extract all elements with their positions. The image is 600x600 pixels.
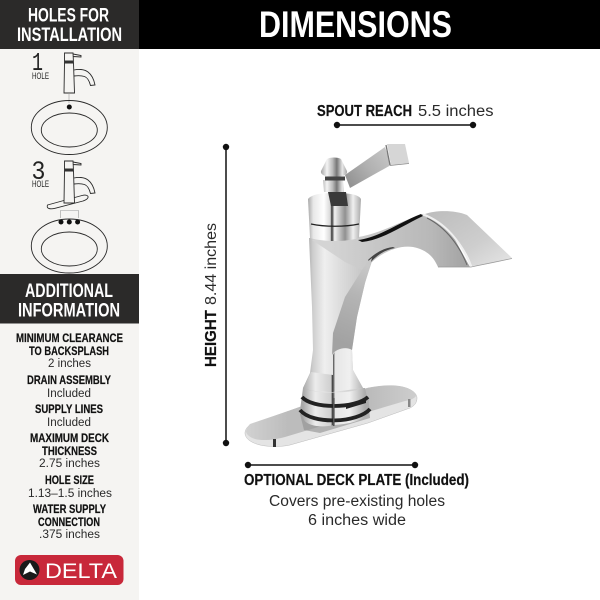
text block: maximum deck thickness xyxy=(30,433,110,470)
text block: maximum deck thickness: THICKNESS xyxy=(42,446,97,458)
text block: water supply connection: WATER SUPPLY xyxy=(33,504,106,516)
panel: sidebar background xyxy=(0,0,139,600)
body foot xyxy=(303,372,333,392)
text block: minimum clearance xyxy=(16,333,123,370)
icon: single-hole faucet xyxy=(64,53,95,103)
text block: hole size: 1.13–1.5 inches xyxy=(28,488,112,500)
panel: additional information xyxy=(0,274,139,585)
icon: sink with three holes xyxy=(31,210,107,273)
logo: Delta xyxy=(15,555,124,585)
text block: minimum clearance: 2 inches xyxy=(48,358,91,370)
label: 1 hole: 1 xyxy=(32,48,43,78)
callout: optional deck plate xyxy=(244,462,469,529)
text block: drain assembly: DRAIN ASSEMBLY xyxy=(27,375,111,387)
logo: Delta: DELTA xyxy=(45,560,117,583)
icon: sink with one hole xyxy=(31,100,107,154)
heading: additional information xyxy=(0,274,139,324)
callout: optional deck plate: Covers pre-existing holes xyxy=(269,493,445,510)
label: 3 hole: 3 xyxy=(32,157,45,185)
handle lever xyxy=(345,144,409,188)
spout top dark edge xyxy=(358,214,423,242)
text block: water supply connection: .375 inches xyxy=(39,529,100,541)
handle cap xyxy=(321,158,347,192)
heading: holes for installation: HOLES FOR xyxy=(28,6,109,27)
callout: optional deck plate: OPTIONAL DECK PLATE (Included) xyxy=(244,472,469,489)
callout: optional deck plate: 6 inches wide xyxy=(308,512,406,529)
text block: hole size xyxy=(28,475,112,500)
panel: holes for installation xyxy=(0,0,139,273)
icon: three-hole faucet with deck plate xyxy=(47,161,95,209)
faucet illustration xyxy=(245,144,512,447)
spout front face xyxy=(425,211,512,266)
text block: drain assembly xyxy=(27,375,111,400)
text block: water supply connection xyxy=(33,504,106,541)
text block: maximum deck thickness: MAXIMUM DECK xyxy=(30,433,110,445)
callout: spout reach xyxy=(317,103,494,128)
heading: holes for installation xyxy=(0,0,139,49)
faucet collar xyxy=(308,192,361,241)
text block: water supply connection: CONNECTION xyxy=(38,517,100,529)
callout: spout reach: SPOUT REACH xyxy=(317,103,412,120)
arrow: height measure xyxy=(223,144,229,446)
text block: maximum deck thickness: 2.75 inches xyxy=(39,458,100,470)
text block: drain assembly: Included xyxy=(47,388,91,400)
column below shadow xyxy=(333,348,363,392)
heading: additional information: ADDITIONAL xyxy=(25,281,113,302)
callout: height: HEIGHT xyxy=(203,309,220,367)
label: 3 hole: HOLE xyxy=(32,179,49,189)
text block: supply lines xyxy=(35,404,103,429)
arrow: deck plate measure xyxy=(245,462,418,468)
arrow: spout reach measure xyxy=(334,122,476,128)
spout xyxy=(312,211,512,355)
deck plate xyxy=(245,386,417,447)
text block: hole size: HOLE SIZE xyxy=(45,475,94,487)
text block: minimum clearance: MINIMUM CLEARANCE xyxy=(16,333,123,345)
body shaded side xyxy=(332,258,372,355)
title band: dimensions: DIMENSIONS xyxy=(259,3,452,45)
heading: holes for installation: INSTALLATION xyxy=(17,25,122,46)
callout: spout reach: 5.5 inches xyxy=(418,103,494,120)
callout: height: 8.44 inches xyxy=(203,223,220,305)
text block: supply lines: Included xyxy=(47,417,91,429)
spout underside reflection xyxy=(368,247,395,263)
label: 1 hole: HOLE xyxy=(32,71,49,81)
heading: additional information: INFORMATION xyxy=(18,300,120,322)
text block: minimum clearance: TO BACKSPLASH xyxy=(29,346,109,358)
text block: supply lines: SUPPLY LINES xyxy=(35,404,103,416)
faucet body xyxy=(303,238,373,392)
title band: dimensions xyxy=(139,0,600,49)
callout: height xyxy=(203,144,229,446)
faucet base rings xyxy=(300,388,370,426)
spout ridge xyxy=(423,214,471,266)
